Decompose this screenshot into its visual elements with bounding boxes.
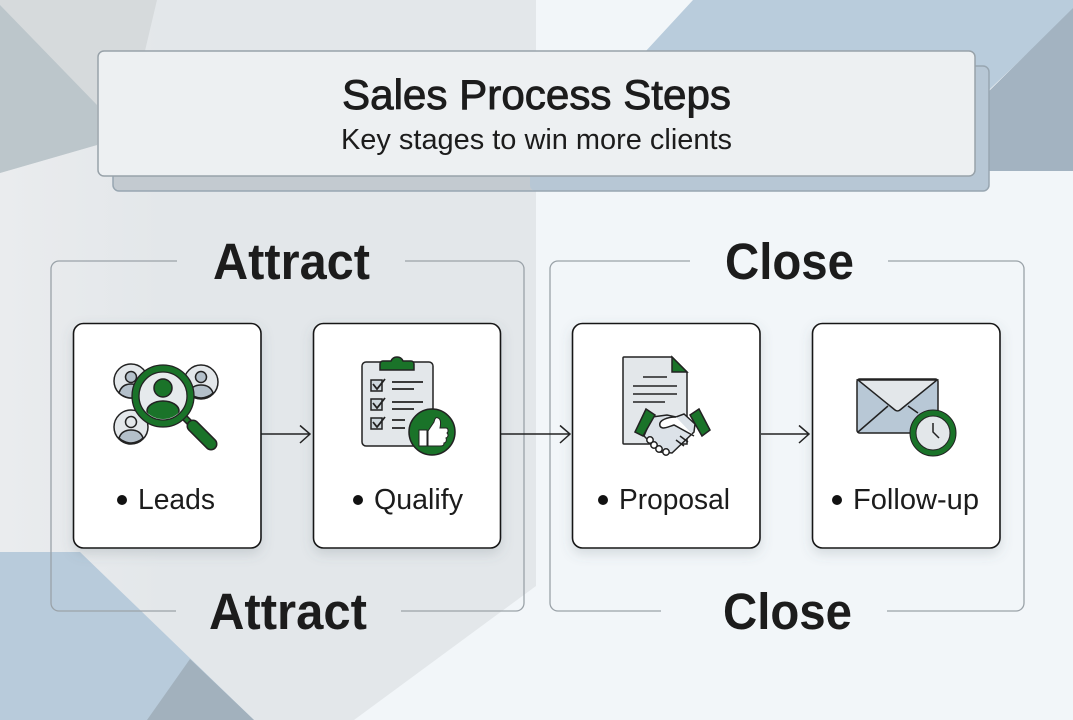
card: Proposal xyxy=(572,324,760,548)
Close bottom heading: Close xyxy=(723,583,852,640)
card: Follow-up xyxy=(812,324,1000,548)
Close top heading: Close xyxy=(725,233,854,290)
icon: envelope with clock xyxy=(857,379,956,456)
banner back layer xyxy=(113,66,989,191)
bullet: Leads xyxy=(117,495,127,505)
bullet: Follow-up xyxy=(832,495,842,505)
arrow: Leads to Qualify xyxy=(261,426,310,443)
bullet: Proposal xyxy=(598,495,608,505)
subtitle: Key stages to win more clients xyxy=(341,124,732,156)
Close frame xyxy=(550,261,1024,611)
card: Qualify xyxy=(314,324,500,548)
Attract bottom heading: Attract xyxy=(209,583,367,640)
banner front panel xyxy=(98,51,975,176)
panel: Close xyxy=(550,233,1024,640)
Attract frame xyxy=(51,261,524,611)
bullet: Qualify xyxy=(353,495,363,505)
arrow: Qualify to Proposal xyxy=(500,426,570,443)
Attract top heading: Attract xyxy=(213,233,370,290)
icon: clipboard with thumbs up xyxy=(362,357,455,455)
label: Leads: Leads xyxy=(138,484,215,516)
card: Leads xyxy=(74,324,261,548)
label: Qualify: Qualify xyxy=(374,484,464,516)
header banner xyxy=(98,51,989,191)
icon: people under magnifying glass xyxy=(114,364,218,444)
arrow: Proposal to Follow-up xyxy=(761,426,809,443)
icon: document with handshake xyxy=(623,357,710,455)
title: Sales Process Steps xyxy=(342,71,731,118)
panel: Attract xyxy=(51,233,524,640)
label: Follow-up: Follow-up xyxy=(853,484,979,516)
label: Proposal: Proposal xyxy=(619,484,730,516)
